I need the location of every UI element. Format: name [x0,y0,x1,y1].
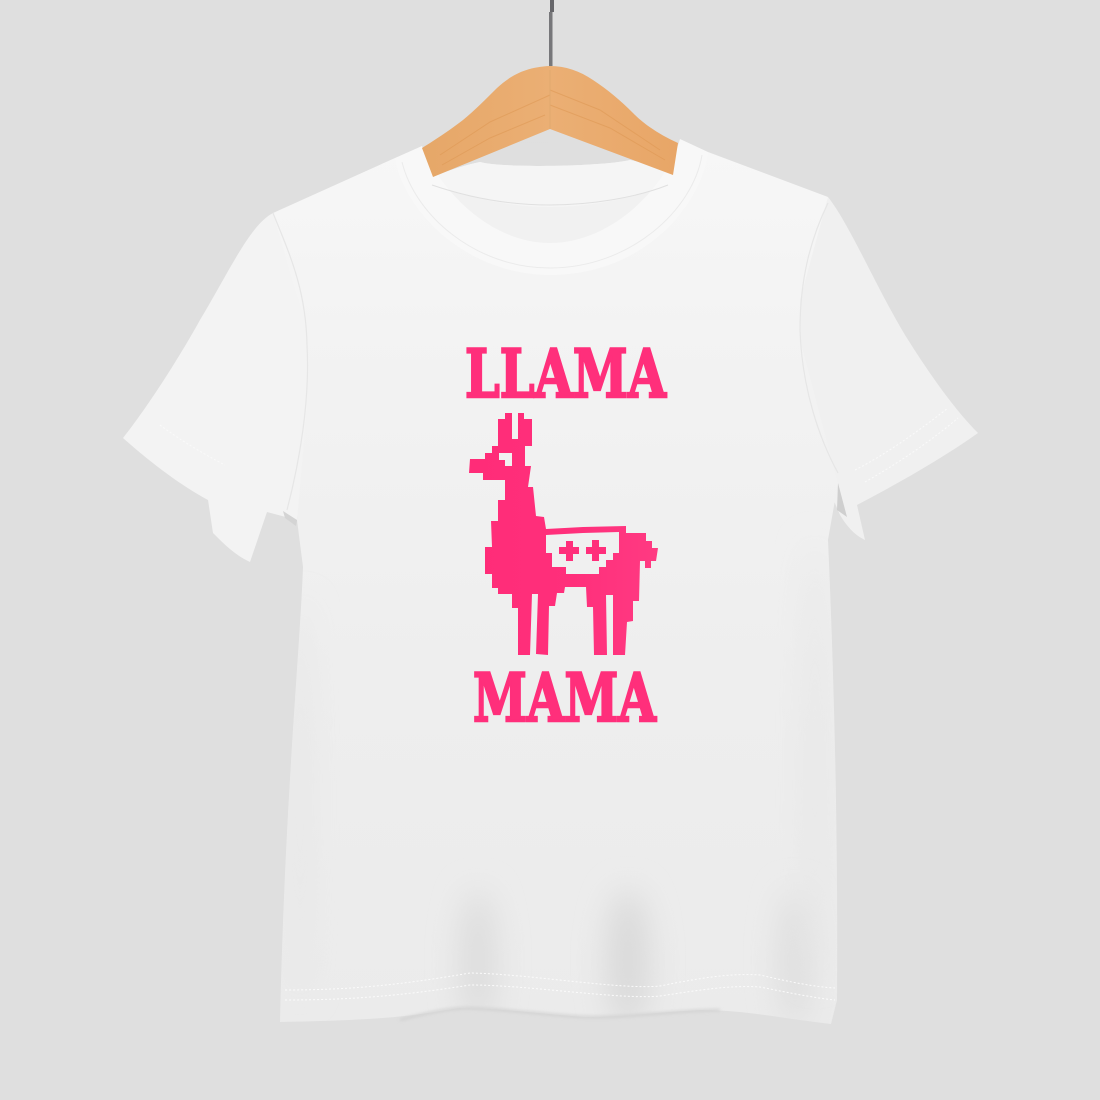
right sleeve [790,197,978,540]
hanger hook [549,0,554,66]
neck opening background [420,138,680,177]
back inside of the collar [432,160,672,245]
wood grain [440,70,665,165]
print: LLAMA heading: LLAMA [465,335,667,413]
left sleeve [123,213,312,562]
underarm shadows [283,483,847,526]
blanket crosses [559,540,606,561]
hem stitching [285,973,835,1000]
print: pixel llama [469,413,658,655]
hem shadow [400,1008,720,1020]
front collar [395,139,708,275]
llama silhouette [469,413,658,655]
wooden hanger [422,66,678,177]
t-shirt mockup scene [123,0,978,1024]
sleeve seams [273,203,838,510]
print: MAMA heading: MAMA [473,659,657,737]
collar stitching [402,155,702,268]
sleeve hem stitching [160,408,958,482]
shirt body fold shading [290,540,825,1030]
shirt body [273,152,838,1024]
